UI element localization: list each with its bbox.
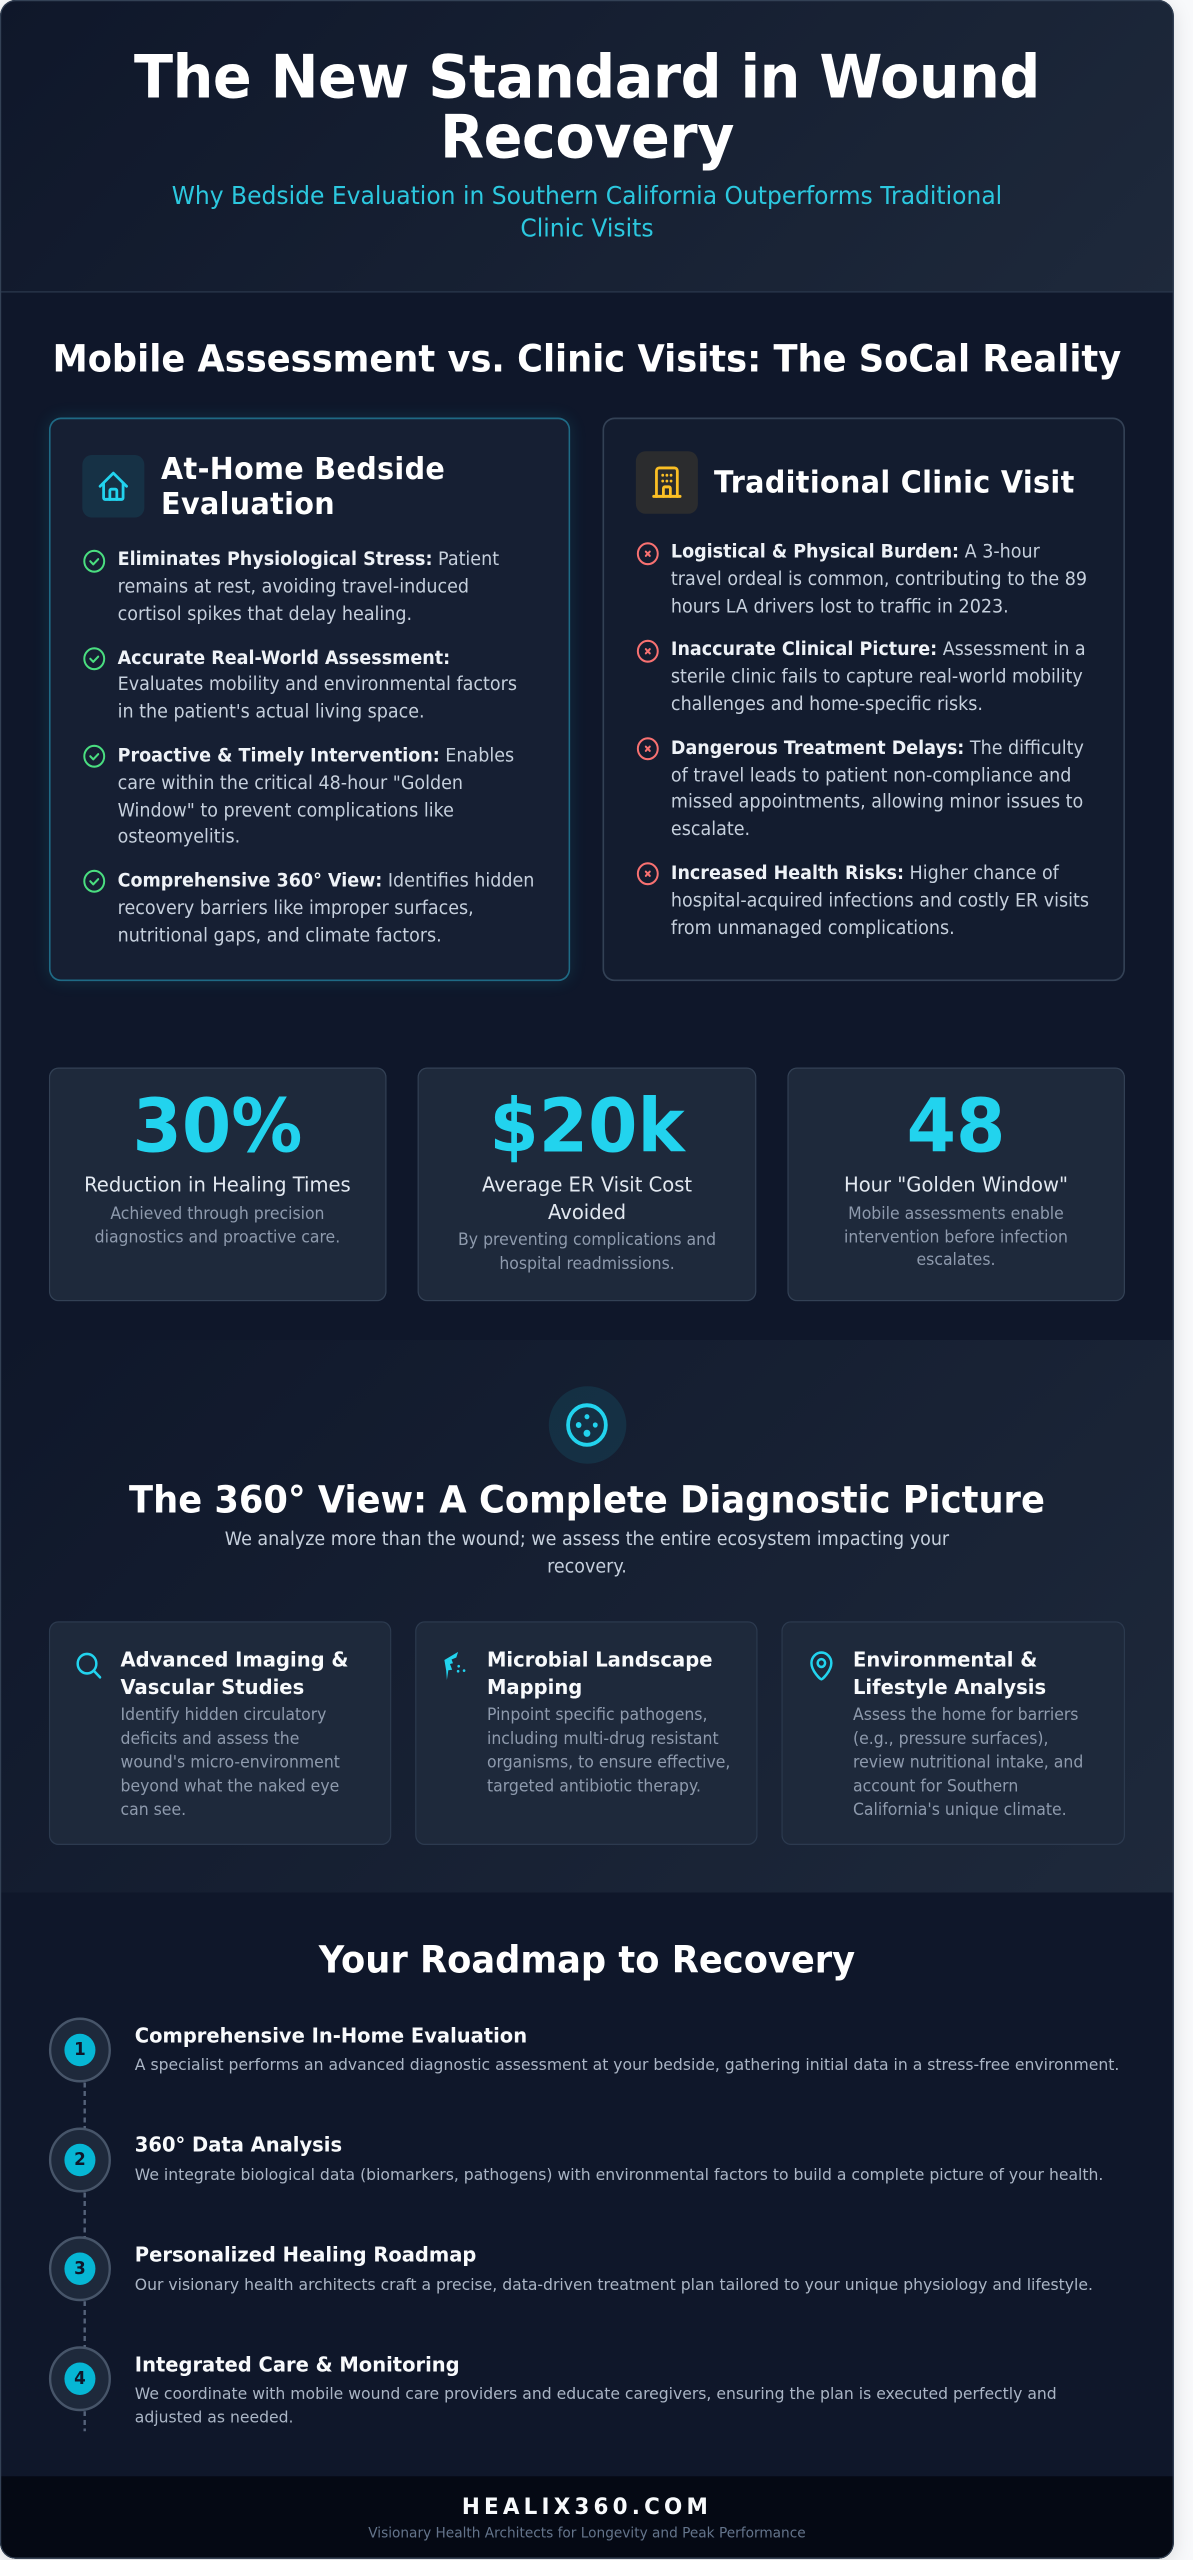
step text: We coordinate with mobile wound care providers and educate caregivers, ensuring the plan is executed perfectly and <box>135 2385 1057 2404</box>
step text <box>135 2385 1057 2428</box>
card title: Advanced Imaging & <box>120 1648 348 1671</box>
benefit 1: Eliminates Physiological Stress: Patient <box>118 549 499 571</box>
label: Reduction in Healing Times <box>84 1172 351 1196</box>
card heading: Evaluation <box>161 486 335 521</box>
note: escalates. <box>917 1252 995 1270</box>
icon: house <box>83 455 145 518</box>
card title: Mapping <box>487 1675 582 1699</box>
stat: 48 <box>787 1068 1125 1301</box>
icon: diagnostic circle <box>548 1386 626 1464</box>
drawback 2 <box>671 639 1086 715</box>
step text: A specialist performs an advanced diagnostic assessment at your bedside, gathering initial data in a stress-free environment. <box>135 2057 1119 2076</box>
note: diagnostics and proactive care. <box>95 1228 340 1247</box>
benefit 2 <box>118 647 517 723</box>
value: 30% <box>132 1084 302 1170</box>
benefit 2: in the patient's actual living space. <box>118 701 425 723</box>
drawback 3: escalate. <box>671 819 750 840</box>
card: environmental <box>781 1621 1125 1845</box>
icon: location pin <box>810 1651 833 1681</box>
section heading: Your Roadmap to Recovery <box>319 1939 855 1981</box>
card text: organisms, to ensure effective, <box>487 1754 730 1772</box>
title <box>134 42 1040 172</box>
panel: roadmap <box>0 1892 1174 2476</box>
step number 1: 1 <box>74 2040 86 2060</box>
icon: magnifier <box>76 1652 102 1679</box>
step text: We integrate biological data (biomarkers, pathogens) with environmental factors to build a complete picture of your health. <box>135 2166 1103 2185</box>
card text: can see. <box>120 1801 186 1819</box>
step number 4: 4 <box>74 2368 86 2388</box>
drawback 1: travel ordeal is common, contributing to the 89 <box>671 569 1087 590</box>
step number 2 <box>49 2127 111 2192</box>
drawback 2: sterile clinic fails to capture real-world mobility <box>671 667 1083 688</box>
card title: Lifestyle Analysis <box>853 1675 1046 1699</box>
card text: account for Southern <box>853 1777 1018 1796</box>
header <box>0 0 1174 292</box>
icon: building <box>635 452 697 514</box>
subtitle <box>172 181 1002 242</box>
panel: traditional clinic visit <box>603 418 1125 981</box>
step number 2: 2 <box>74 2149 86 2169</box>
card: imaging <box>49 1621 392 1845</box>
panel: 360 view <box>0 1340 1174 1892</box>
note: Achieved through precision <box>110 1205 324 1223</box>
section heading: The 360° View: A Complete Diagnostic Picture <box>129 1479 1045 1521</box>
step number 1 <box>49 2017 111 2082</box>
panel: at-home bedside evaluation <box>49 418 570 981</box>
drawback 1: hours LA drivers lost to traffic in 2023. <box>671 596 1009 618</box>
icon: check <box>83 647 106 670</box>
value: $20k <box>489 1084 685 1170</box>
card text <box>487 1707 730 1796</box>
card text: Pinpoint specific pathogens, <box>487 1707 707 1725</box>
label <box>482 1172 692 1223</box>
value: 48 <box>907 1084 1005 1170</box>
drawback 2: Inaccurate Clinical Picture: Assessment in a <box>671 639 1086 661</box>
benefit 3: osteomyelitis. <box>118 827 240 848</box>
card text <box>853 1707 1083 1819</box>
card text: wound's micro-environment <box>120 1754 340 1772</box>
benefit 1: cortisol spikes that delay healing. <box>118 604 412 625</box>
drawback 3: of travel leads to patient non-compliance and <box>671 765 1071 786</box>
benefit 4: Comprehensive 360° View: Identifies hidden <box>118 870 534 891</box>
card text <box>120 1707 340 1819</box>
heading: comparison: Mobile Assessment vs. Clinic Visits: The SoCal Reality <box>53 338 1121 380</box>
section intro: We analyze more than the wound; we assess the entire ecosystem impacting your <box>225 1528 949 1549</box>
subtitle: Clinic Visits <box>520 213 654 242</box>
card title: Environmental & <box>853 1648 1037 1671</box>
card text: (e.g., pressure surfaces), <box>853 1730 1049 1749</box>
step text: adjusted as needed. <box>135 2409 293 2428</box>
drawback 4: Increased Health Risks: Higher chance of <box>671 862 1059 884</box>
icon: cross <box>636 640 659 663</box>
benefit 4: nutritional gaps, and climate factors. <box>118 925 442 946</box>
note <box>95 1205 340 1247</box>
card title <box>853 1648 1046 1699</box>
brand: HEALIX360.COM <box>462 2493 712 2519</box>
step number 4 <box>49 2346 111 2411</box>
step number 3 <box>49 2236 111 2301</box>
step title: Comprehensive In-Home Evaluation <box>135 2023 527 2047</box>
icon: cross <box>636 542 659 566</box>
step 1 <box>49 2018 1119 2128</box>
step 2 <box>48 2128 1103 2237</box>
benefit 3: Proactive & Timely Intervention: Enables <box>118 745 514 766</box>
benefit 3: Window" to prevent complications like <box>118 799 454 821</box>
step 3 <box>48 2236 1093 2347</box>
drawback 3 <box>671 737 1084 840</box>
drawback 1 <box>671 542 1087 618</box>
section intro: recovery. <box>547 1556 627 1577</box>
drawback 4: hospital-acquired infections and costly ER visits <box>671 890 1089 911</box>
card text: Assess the home for barriers <box>853 1707 1078 1725</box>
drawback 2: challenges and home-specific risks. <box>671 694 983 715</box>
card title <box>487 1648 712 1699</box>
benefit 2: Accurate Real-World Assessment: <box>118 647 450 668</box>
step title: 360° Data Analysis <box>135 2133 342 2157</box>
step title: Personalized Healing Roadmap <box>135 2242 476 2266</box>
drawback 4 <box>671 862 1089 938</box>
card heading: At-Home Bedside <box>161 451 445 486</box>
stat: 30% <box>49 1068 386 1301</box>
title: The New Standard in Wound <box>134 42 1040 112</box>
benefit 4: recovery barriers like improper surfaces, <box>118 897 474 919</box>
icon: check <box>83 550 106 573</box>
icon: microbe <box>444 1652 466 1680</box>
note <box>458 1232 716 1274</box>
title: Recovery <box>440 102 734 172</box>
label: Average ER Visit Cost <box>482 1172 692 1196</box>
label: Hour "Golden Window" <box>844 1172 1068 1196</box>
icon: cross <box>636 737 659 760</box>
card text: targeted antibiotic therapy. <box>487 1777 701 1796</box>
note <box>844 1205 1068 1270</box>
benefit 1: remains at rest, avoiding travel-induced <box>118 577 469 598</box>
label: Avoided <box>548 1199 626 1223</box>
note: intervention before infection <box>844 1228 1068 1247</box>
drawback 4: from unmanaged complications. <box>671 917 955 938</box>
footer <box>0 2476 1174 2559</box>
icon: check <box>83 744 106 768</box>
card heading <box>161 451 445 521</box>
benefit 1 <box>118 549 499 625</box>
card text: review nutritional intake, and <box>853 1754 1083 1772</box>
benefit 2: Evaluates mobility and environmental factors <box>118 674 517 695</box>
drawback 3: missed appointments, allowing minor issues to <box>671 792 1083 813</box>
icon: cross <box>636 862 659 886</box>
card: microbial <box>415 1621 758 1845</box>
step number 3: 3 <box>74 2259 86 2279</box>
icon: check <box>83 870 106 893</box>
card title: Vascular Studies <box>120 1675 304 1699</box>
tagline: Visionary Health Architects for Longevity and Peak Performance <box>368 2524 806 2542</box>
benefit 3: care within the critical 48-hour "Golden <box>118 772 463 793</box>
step title: Integrated Care & Monitoring <box>135 2352 460 2376</box>
note: By preventing complications and <box>458 1232 716 1250</box>
benefit 3 <box>118 745 514 848</box>
card text: including multi-drug resistant <box>487 1730 719 1749</box>
card text: beyond what the naked eye <box>120 1777 339 1796</box>
step text: Our visionary health architects craft a precise, data-driven treatment plan tailored to your unique physiology and lifestyle. <box>135 2276 1093 2295</box>
drawback 3: Dangerous Treatment Delays: The difficulty <box>671 737 1084 759</box>
card text: California's unique climate. <box>853 1801 1067 1819</box>
drawback 1: Logistical & Physical Burden: A 3-hour <box>671 542 1040 563</box>
card title <box>120 1648 348 1699</box>
card text: deficits and assess the <box>120 1730 299 1749</box>
subtitle: Why Bedside Evaluation in Southern California Outperforms Traditional <box>172 181 1002 210</box>
note: Mobile assessments enable <box>848 1205 1064 1223</box>
card title: Microbial Landscape <box>487 1648 712 1671</box>
stat: $20k <box>418 1068 756 1301</box>
section intro <box>225 1528 950 1577</box>
card text: Identify hidden circulatory <box>120 1707 326 1725</box>
benefit 4 <box>118 870 534 946</box>
note: hospital readmissions. <box>499 1255 675 1274</box>
card heading: Traditional Clinic Visit <box>714 465 1075 500</box>
step 4 <box>48 2346 1057 2432</box>
